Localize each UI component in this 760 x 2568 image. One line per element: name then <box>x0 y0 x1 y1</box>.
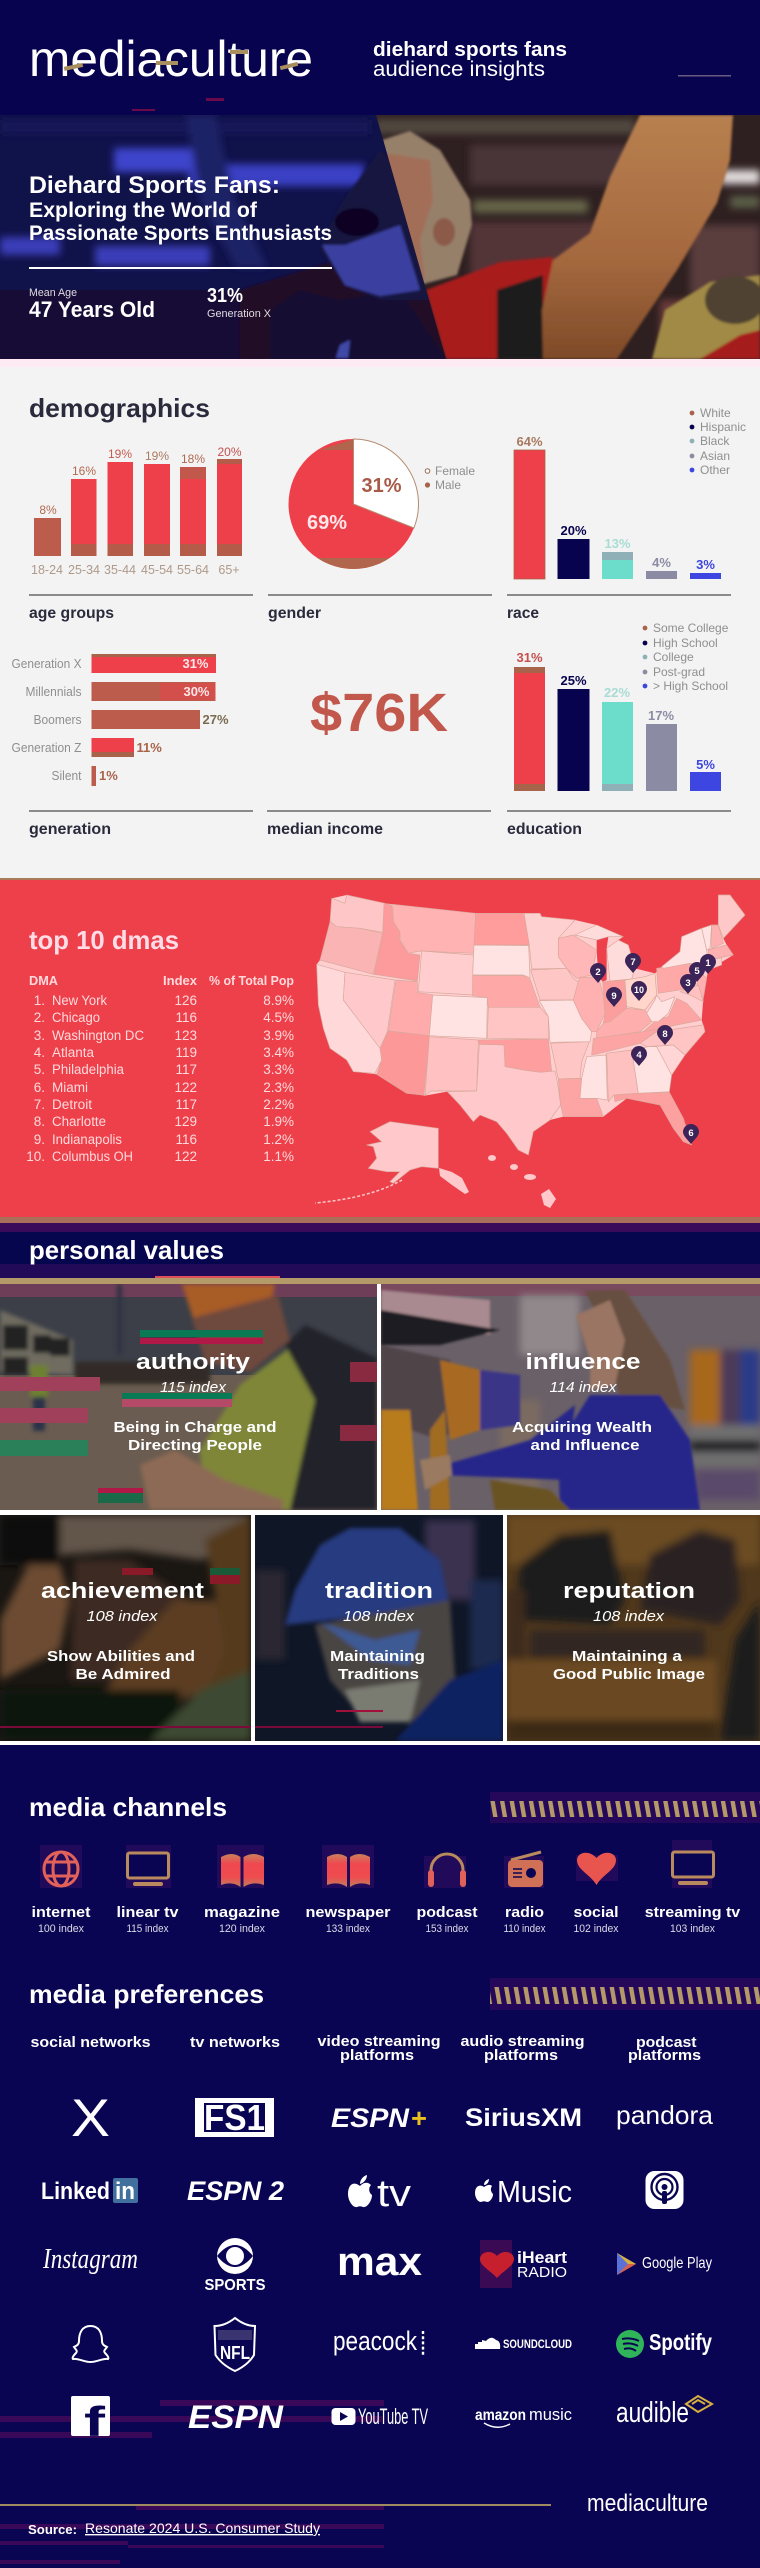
table: top 10 dmas: 129 <box>174 1114 197 1129</box>
map pins: 2 <box>595 967 601 978</box>
hero red jersey <box>426 257 553 359</box>
bar chart: generation: Generation X <box>12 656 82 671</box>
stat: mean age <box>29 287 155 322</box>
card: tradition: 108 index <box>343 1608 415 1625</box>
table: top 10 dmas: New York <box>52 993 107 1008</box>
icon: television <box>126 1845 171 1888</box>
column headers: podcast <box>636 2034 696 2051</box>
map: united states <box>315 895 745 1208</box>
pie chart: gender: 31% <box>361 475 402 497</box>
bar chart: generation: 31% <box>182 656 209 671</box>
card: influence: 114 index <box>550 1379 617 1396</box>
table: top 10 dmas: 1. <box>34 993 45 1008</box>
legend: gender: Female <box>435 464 475 478</box>
channel: streaming tv: streaming tv <box>645 1904 741 1921</box>
table: top 10 dmas: % of Total Pop <box>209 973 294 988</box>
card: authority: 115 index <box>160 1379 227 1396</box>
channel: newspaper: newspaper <box>306 1904 391 1921</box>
table: top 10 dmas: 116 <box>175 1010 197 1025</box>
logo: mediaculture footer: mediaculture <box>587 2490 708 2517</box>
header title: audience insights <box>373 58 545 81</box>
table: top 10 dmas: DMA <box>29 973 59 988</box>
hero raised arm <box>542 115 733 359</box>
logo: facebook: f <box>84 2398 106 2445</box>
channel: streaming tv: 103 index <box>670 1923 715 1935</box>
bar chart: age groups: 18% <box>181 452 205 466</box>
card: reputation: 108 index <box>593 1608 665 1625</box>
bar chart: age groups: 19% <box>108 447 132 461</box>
column headers: platforms <box>340 2047 414 2064</box>
legend: race: Hispanic <box>700 420 746 434</box>
logo: spotify: Spotify <box>649 2329 712 2355</box>
card: tradition: tradition <box>325 1578 433 1603</box>
label: race: race <box>507 605 539 622</box>
channel: podcast: 153 index <box>426 1923 469 1935</box>
logo: audible: audible <box>616 2397 689 2429</box>
logo: cbs sports <box>204 2238 266 2294</box>
table: top 10 dmas: Indianapolis <box>52 1132 122 1147</box>
map pins <box>590 953 716 1144</box>
card: authority <box>0 1284 377 1510</box>
logo: google play <box>617 2253 712 2275</box>
hero photo panel <box>0 115 760 359</box>
header <box>0 0 760 115</box>
heading: media channels: media channels <box>29 1792 227 1822</box>
legend: education: College <box>653 650 694 664</box>
channel: podcast <box>416 1854 478 1935</box>
label: education: education <box>507 821 582 838</box>
card: influence: influence <box>526 1349 640 1374</box>
bar chart: age groups: 19% <box>145 449 169 463</box>
card: influence: and Influence <box>530 1437 640 1454</box>
legend: race: Black <box>700 434 730 448</box>
bar chart: race: 4% <box>652 555 671 570</box>
table: top 10 dmas: 117 <box>175 1062 197 1077</box>
header title <box>373 39 567 81</box>
channel: magazine <box>204 1845 280 1935</box>
card: tradition: Maintaining <box>330 1648 425 1665</box>
bar chart: race: 3% <box>696 557 715 572</box>
table: top 10 dmas: 122 <box>174 1149 197 1164</box>
bar chart: age groups: 18-24 <box>31 563 63 577</box>
icon: streaming television <box>672 1840 714 1888</box>
legend: race: White <box>700 406 731 420</box>
alaska <box>367 1122 438 1183</box>
stat: mean age: Mean Age <box>29 287 77 299</box>
icon: radio <box>504 1852 544 1888</box>
bar chart: education: 5% <box>696 757 715 772</box>
table: top 10 dmas: Miami <box>52 1080 88 1095</box>
column headers: tv networks <box>190 2034 280 2051</box>
bar chart: age groups <box>31 445 242 577</box>
legend: gender <box>425 464 475 492</box>
map pins: 10 <box>634 985 644 995</box>
table: top 10 dmas: 117 <box>175 1097 197 1112</box>
table: top 10 dmas: 4. <box>34 1045 45 1060</box>
panel: media preferences <box>0 1978 760 2564</box>
legend: race: Asian <box>700 449 730 463</box>
table: top 10 dmas: 1.9% <box>263 1114 294 1129</box>
logo: cbs sports: SPORTS <box>204 2277 266 2294</box>
card: achievement <box>0 1515 251 1741</box>
logo: youtube tv <box>332 2404 428 2429</box>
table: top 10 dmas: 3.9% <box>263 1028 294 1043</box>
logo: amazon music: amazon <box>475 2407 526 2424</box>
channel: magazine: magazine <box>204 1904 280 1921</box>
card: reputation <box>507 1515 760 1741</box>
panel: media channels <box>29 1792 760 1935</box>
logo: espn 2: ESPN 2 <box>187 2176 284 2206</box>
map pins: 5 <box>694 966 700 977</box>
channel: radio: radio <box>505 1904 544 1921</box>
card: achievement: 108 index <box>86 1608 158 1625</box>
glitch bands <box>0 2400 384 2564</box>
channel: social <box>574 1853 619 1935</box>
bar chart: generation: 1% <box>99 768 118 783</box>
logo: linkedin: in <box>115 2178 135 2205</box>
logo: iheart radio: iHeart <box>517 2248 567 2267</box>
source line: Source: <box>28 2522 77 2537</box>
card: authority: Directing People <box>128 1437 262 1454</box>
table: top 10 dmas: 9. <box>34 1132 45 1147</box>
bar chart: generation: Millennials <box>26 684 82 699</box>
stat: generation x: 31% <box>207 285 243 307</box>
footer <box>0 2490 708 2537</box>
channel: internet <box>32 1845 90 1935</box>
logo: apple music: Music <box>497 2174 572 2209</box>
legend: education: > High School <box>653 679 728 693</box>
logo: amazon music: music <box>529 2405 572 2424</box>
bar chart: generation: Generation Z <box>12 740 82 755</box>
icon: globe <box>40 1845 82 1888</box>
channel: internet: 100 index <box>38 1923 84 1935</box>
table: top 10 dmas: 3. <box>34 1028 45 1043</box>
hero title <box>29 172 332 245</box>
channel: social: 102 index <box>574 1923 619 1935</box>
table: top 10 dmas: 2.3% <box>263 1080 294 1095</box>
bar chart: generation <box>12 654 229 786</box>
heading: demographics: demographics <box>29 393 210 423</box>
table: top 10 dmas: 119 <box>175 1045 197 1060</box>
table: top 10 dmas: Washington DC <box>52 1028 144 1043</box>
logo: amazon music <box>475 2405 572 2427</box>
legend: race: Other <box>700 463 730 477</box>
logo: siriusxm: SiriusXM <box>465 2104 582 2132</box>
stat: median income: $76K <box>310 683 448 743</box>
column headers: video streaming <box>318 2033 440 2050</box>
channel: magazine: 120 index <box>219 1923 265 1935</box>
card: reputation: reputation <box>563 1578 695 1603</box>
logo: fs1: FS1 <box>204 2097 265 2138</box>
bar chart: education: 17% <box>648 708 674 723</box>
card: achievement: Show Abilities and <box>47 1648 195 1665</box>
hero photo left blue tinted <box>0 115 450 359</box>
logo: espn plus: ESPN <box>331 2103 410 2133</box>
source line: Resonate 2024 U.S. Consumer Study <box>85 2520 320 2536</box>
bar chart: education <box>514 621 729 791</box>
label: age groups: age groups <box>29 605 114 622</box>
bar chart: education: 22% <box>604 685 630 700</box>
bar chart: age groups: 25-34 <box>68 563 100 577</box>
table: top 10 dmas: 1.2% <box>263 1132 294 1147</box>
bar chart: age groups: 8% <box>39 503 57 517</box>
card: influence: Acquiring Wealth <box>512 1419 652 1436</box>
table: top 10 dmas: 6. <box>34 1080 45 1095</box>
bar chart: age groups: 35-44 <box>104 563 136 577</box>
icon: open book <box>217 1845 264 1888</box>
column headers: platforms <box>484 2047 558 2064</box>
logo: peacock: peacock <box>333 2326 417 2356</box>
bar chart: generation: 30% <box>183 684 210 699</box>
table: top 10 dmas: 116 <box>175 1132 197 1147</box>
logo: google play: Google Play <box>642 2255 712 2272</box>
panel: personal values <box>0 1232 760 1745</box>
logo: iheart radio: RADIO <box>517 2264 567 2281</box>
legend: education: High School <box>653 636 718 650</box>
logo: apple tv <box>348 2173 411 2215</box>
hawaii <box>488 1155 556 1208</box>
logo: iheart radio <box>480 2240 567 2288</box>
bar chart: age groups: 65+ <box>218 563 240 577</box>
table: top 10 dmas: 126 <box>174 993 197 1008</box>
logo: soundcloud: SOUNDCLOUD <box>503 2337 572 2351</box>
channel: podcast: podcast <box>416 1904 478 1921</box>
table: top 10 dmas: 3.4% <box>263 1045 294 1060</box>
panel: top 10 dmas <box>0 878 760 1232</box>
map pins: 4 <box>636 1050 642 1061</box>
logo: apple tv: tv <box>377 2173 411 2215</box>
table: top 10 dmas: Philadelphia <box>52 1062 124 1077</box>
logo: espn: ESPN <box>188 2399 284 2435</box>
column headers: social networks <box>30 2034 150 2051</box>
table: top 10 dmas: Charlotte <box>52 1114 106 1129</box>
table: top 10 dmas: 8. <box>34 1114 45 1129</box>
channel: linear tv: linear tv <box>116 1904 179 1921</box>
card: achievement: achievement <box>41 1578 205 1603</box>
map pins: 1 <box>705 958 711 969</box>
table: top 10 dmas: 4.5% <box>263 1010 294 1025</box>
card: influence <box>381 1284 760 1510</box>
map pins: 9 <box>611 991 617 1002</box>
table: top 10 dmas: 3.3% <box>263 1062 294 1077</box>
alaska panhandle and aleutians <box>315 1168 469 1203</box>
channel: radio: 110 index <box>504 1923 546 1935</box>
legend: race <box>690 406 746 477</box>
legend: education <box>643 621 729 693</box>
logo: nfl shield: NFL <box>220 2343 250 2363</box>
logo: instagram: Instagram <box>42 2243 138 2275</box>
bar chart: generation: 11% <box>136 740 162 755</box>
channel: linear tv: 115 index <box>126 1923 169 1935</box>
icon: headphones <box>424 1854 466 1888</box>
heading: media preferences: media preferences <box>29 1979 264 2009</box>
panel: demographics <box>0 359 760 878</box>
bar chart: age groups: 16% <box>72 464 96 478</box>
column headers: audio streaming <box>460 2033 584 2050</box>
bar chart: education: 25% <box>560 673 587 688</box>
label: generation: generation <box>29 821 111 838</box>
logo: youtube tv: YouTube TV <box>358 2404 428 2429</box>
table: top 10 dmas: 1.1% <box>263 1149 294 1164</box>
table: top 10 dmas: Columbus OH <box>52 1149 133 1164</box>
card: authority: authority <box>136 1349 251 1374</box>
hero title: Diehard Sports Fans: <box>29 172 280 199</box>
logo: nfl shield <box>214 2318 255 2371</box>
hero title: Exploring the World of <box>29 199 258 222</box>
map pins: 8 <box>662 1029 668 1040</box>
channel: linear tv <box>116 1845 179 1935</box>
legend: education: Some College <box>653 621 729 635</box>
table: top 10 dmas: Atlanta <box>52 1045 94 1060</box>
card: reputation: Maintaining a <box>572 1648 683 1665</box>
card: achievement: Be Admired <box>76 1666 170 1683</box>
table: top 10 dmas: Chicago <box>52 1010 100 1025</box>
bar chart: race: 64% <box>516 434 543 449</box>
table: top 10 dmas: 10. <box>26 1149 45 1164</box>
table: top 10 dmas: 8.9% <box>263 993 294 1008</box>
icon: heart <box>576 1853 618 1885</box>
heading: personal values: personal values <box>29 1235 224 1265</box>
table: top 10 dmas: 5. <box>34 1062 45 1077</box>
bar chart: age groups: 20% <box>217 445 242 459</box>
logo: pandora: pandora <box>616 2100 714 2130</box>
logo: x: X <box>71 2089 110 2148</box>
card: reputation: Good Public Image <box>553 1666 705 1683</box>
legend: gender: Male <box>435 478 461 492</box>
table: top 10 dmas <box>26 973 294 1164</box>
map pins: 7 <box>630 957 636 968</box>
pie chart: gender <box>288 439 475 570</box>
channel: radio <box>504 1852 546 1935</box>
legend: education: Post-grad <box>653 665 705 679</box>
logo: linkedin: Linked <box>41 2178 110 2205</box>
bar chart: age groups: 55-64 <box>177 563 209 577</box>
map pins: 3 <box>685 978 691 989</box>
label: gender: gender <box>268 605 321 622</box>
logo: facebook <box>71 2396 110 2445</box>
logo: apple podcasts <box>646 2171 684 2209</box>
channel: newspaper: 133 index <box>326 1923 370 1935</box>
logo: max: max <box>337 2240 422 2284</box>
table: top 10 dmas: 7. <box>34 1097 45 1112</box>
bar chart: race: 20% <box>560 523 587 538</box>
header title: diehard sports fans <box>373 39 567 61</box>
hero blonde fan <box>652 275 760 359</box>
heading: top 10 dmas: top 10 dmas <box>29 925 179 955</box>
channel: internet: internet <box>32 1904 90 1921</box>
bar chart: education: 31% <box>516 650 543 665</box>
bar chart: generation: 27% <box>202 712 229 727</box>
hero photo right stadium <box>370 115 760 359</box>
bar chart: generation: Silent <box>52 768 82 783</box>
bar chart: race: 13% <box>604 536 631 551</box>
table: top 10 dmas: 123 <box>174 1028 197 1043</box>
hero man head <box>382 131 472 290</box>
map pins: 6 <box>688 1128 694 1139</box>
card: tradition <box>255 1515 503 1741</box>
stat: generation x: Generation X <box>207 308 272 320</box>
table: top 10 dmas: 2.2% <box>263 1097 294 1112</box>
logo: spotify <box>616 2329 712 2358</box>
icon: newspaper <box>322 1845 374 1888</box>
column headers <box>30 2033 701 2064</box>
table: top 10 dmas: Detroit <box>52 1097 92 1112</box>
bar chart: generation: Boomers <box>34 712 82 727</box>
table: top 10 dmas: 2. <box>34 1010 45 1025</box>
stat: mean age: 47 Years Old <box>29 297 155 322</box>
channel: streaming tv <box>645 1840 741 1935</box>
logo: espn plus: + <box>411 2103 427 2133</box>
label: median income: median income <box>267 821 383 838</box>
table: top 10 dmas: Index <box>163 973 198 988</box>
pie chart: gender: 69% <box>307 512 347 534</box>
stat: generation x <box>207 285 272 320</box>
card: tradition: Traditions <box>338 1666 419 1683</box>
channel: social: social <box>574 1904 618 1921</box>
logo: snapchat <box>73 2326 108 2362</box>
bar chart: race <box>514 406 746 579</box>
logo: mediaculture: mediaculture <box>29 31 313 87</box>
hero title: Passionate Sports Enthusiasts <box>29 222 332 245</box>
bar chart: age groups: 45-54 <box>141 563 173 577</box>
column headers: platforms <box>628 2047 701 2064</box>
logo: soundcloud <box>475 2337 572 2351</box>
table: top 10 dmas: 122 <box>174 1080 197 1095</box>
channel: newspaper <box>306 1845 391 1935</box>
card: authority: Being in Charge and <box>114 1419 276 1436</box>
